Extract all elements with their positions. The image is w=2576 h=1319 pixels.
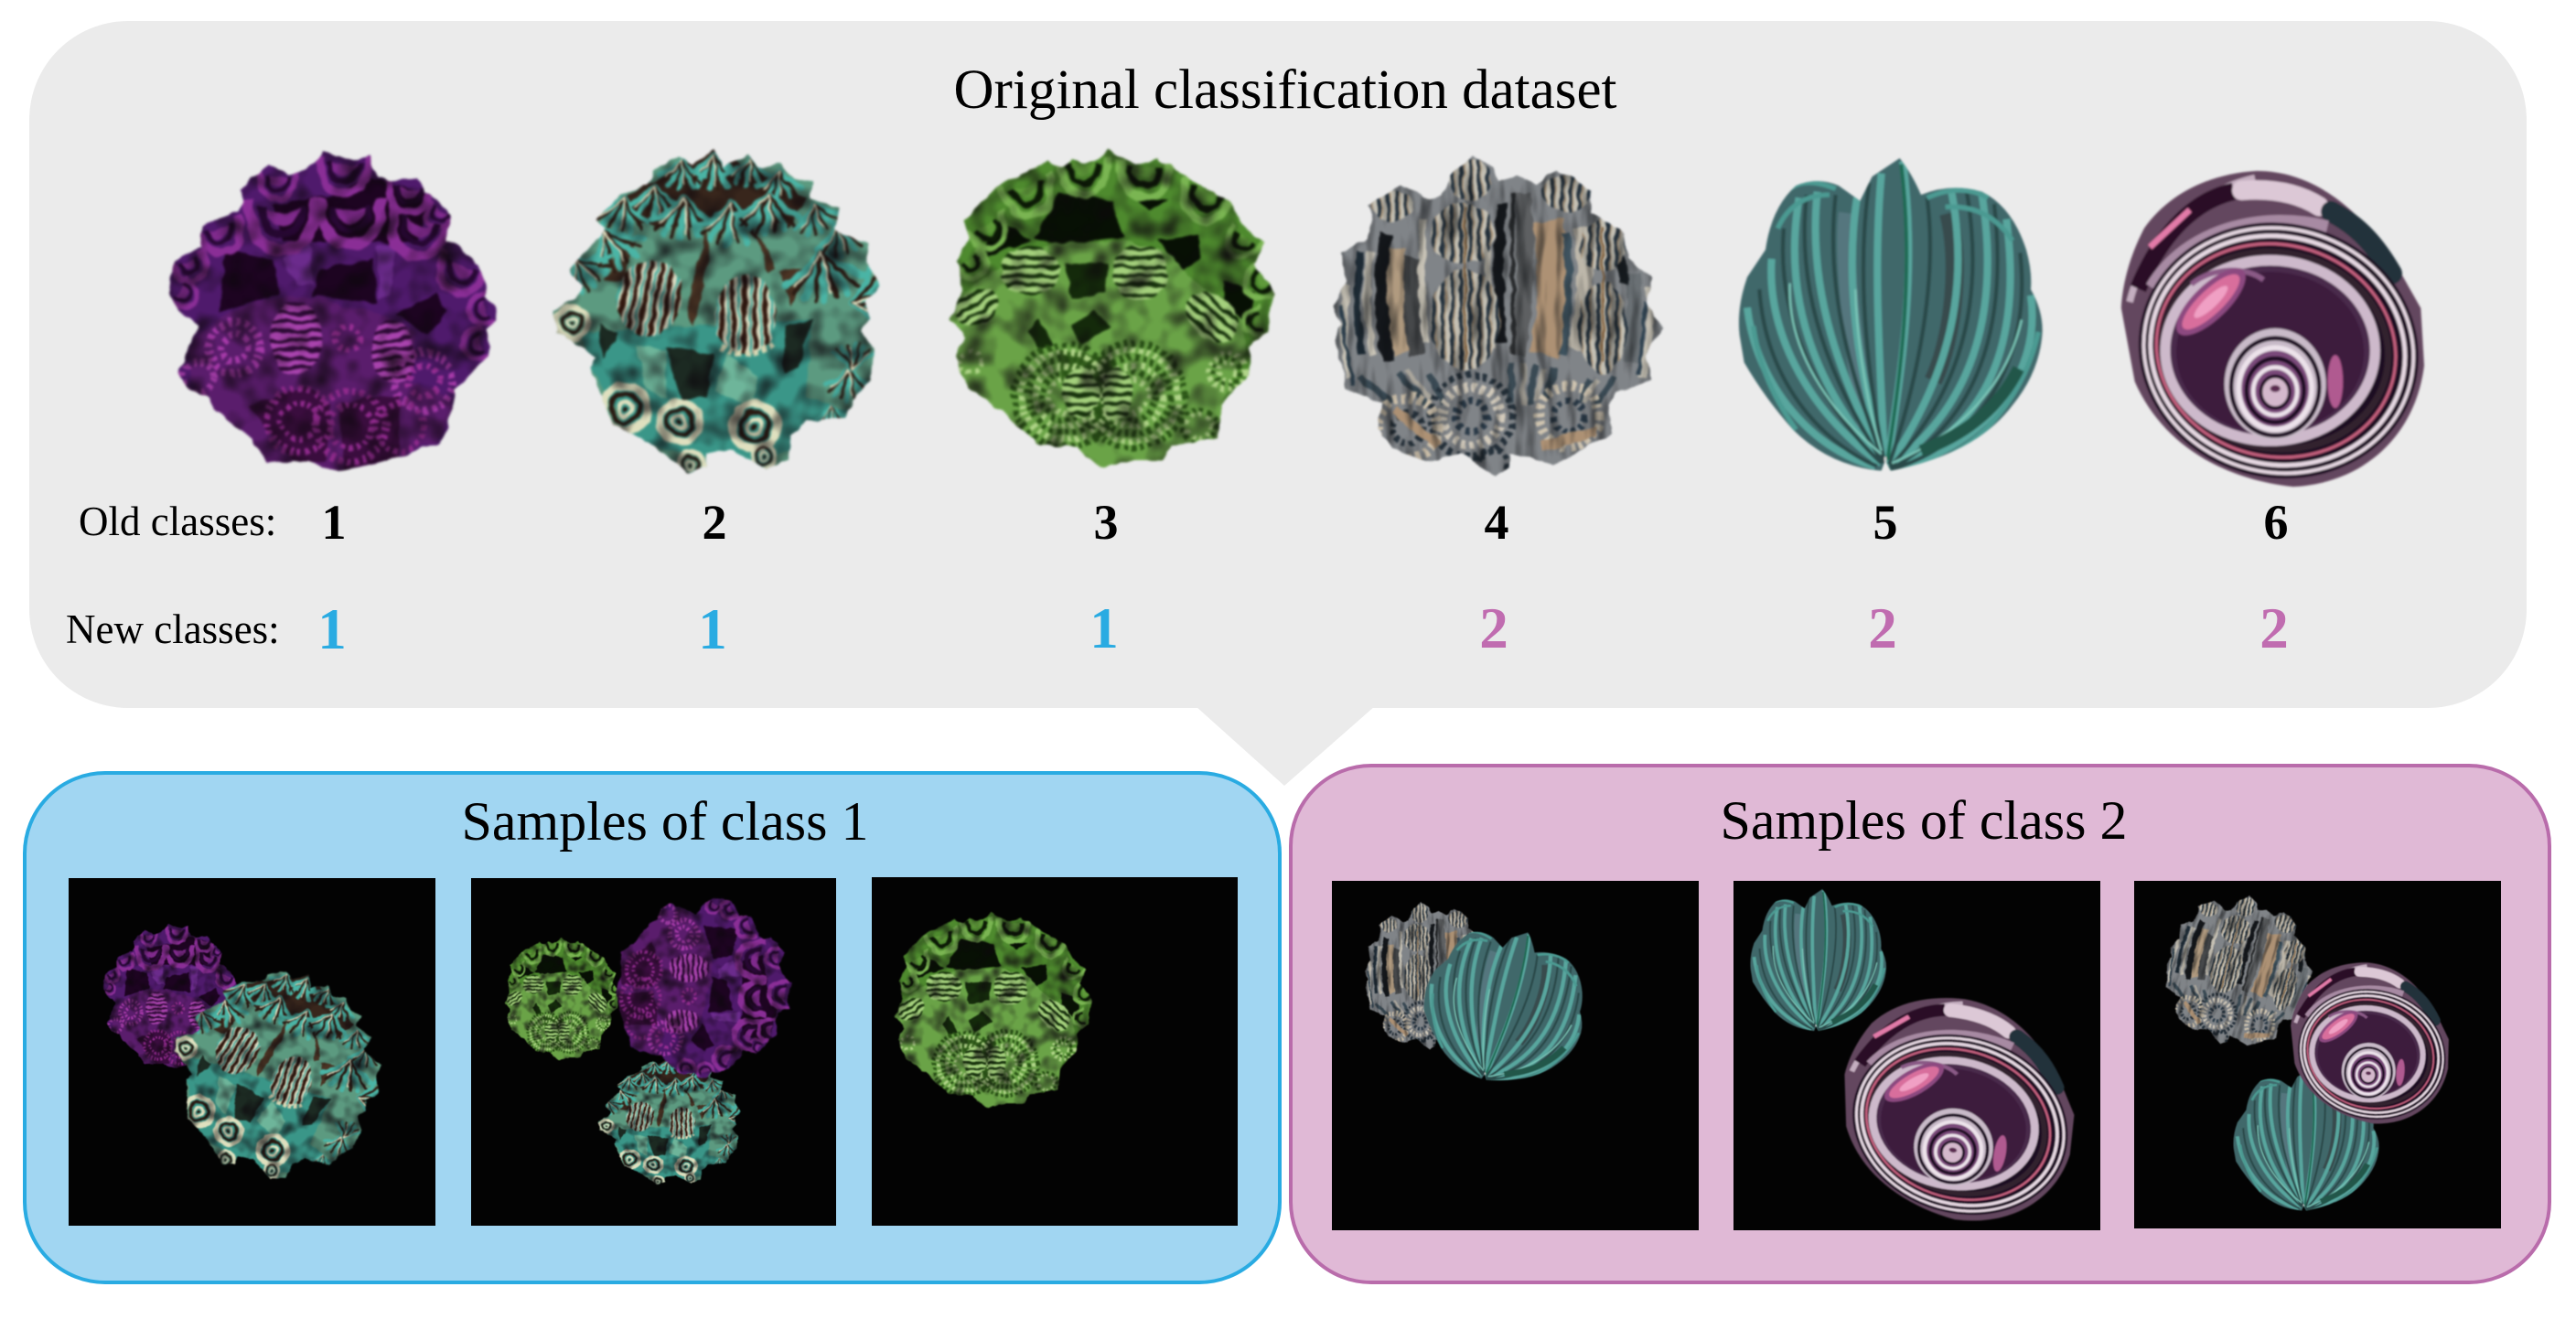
sample image 2 of class 1 (471, 878, 836, 1226)
sample image 2 of class 2 (1733, 879, 2104, 1249)
heading: samples of class 2: Samples of class 2 (1721, 790, 2127, 851)
heading: original classification dataset: Original classification dataset (954, 59, 1617, 121)
sample image 1 of class 2 (1332, 881, 1699, 1230)
new class numbers row (317, 596, 2289, 661)
fractal image: old class 2 (544, 137, 910, 485)
new class numbers row: 2 (1479, 596, 1508, 660)
old class numbers row (322, 495, 2289, 550)
new class numbers row: 2 (1868, 596, 1897, 660)
fractal image: old class 3 (938, 137, 1304, 485)
new class numbers row: 1 (1089, 596, 1119, 660)
panel: samples of class 1 (25, 773, 1280, 1282)
arrow: callout pointer from dataset panel to sample panels (1196, 706, 1375, 786)
old class numbers row: 3 (1094, 495, 1118, 550)
heading: samples of class 1: Samples of class 1 (462, 791, 868, 852)
fractal image: old class 1 (156, 137, 521, 485)
panel: samples of class 2 (1291, 766, 2549, 1282)
sample image 1 of class 1 (69, 878, 435, 1226)
sample image 3 of class 1 (872, 877, 1238, 1226)
new class numbers row: 1 (317, 597, 347, 661)
label: new classes: New classes: (66, 606, 280, 652)
sample image 3 of class 2 (2134, 872, 2501, 1228)
old class numbers row: 4 (1484, 495, 1509, 550)
label: old classes: Old classes: (79, 499, 276, 544)
new class numbers row: 2 (2259, 596, 2289, 660)
old class numbers row: 1 (322, 495, 346, 550)
new class numbers row: 1 (698, 597, 727, 661)
fractal image: old class 4 (1322, 142, 1688, 489)
fractal image: old class 5 (1735, 137, 2055, 485)
old class numbers row: 2 (703, 495, 726, 550)
old class numbers row: 6 (2263, 495, 2289, 550)
old class numbers row: 5 (1873, 495, 1897, 550)
fractal image: old class 6 (2120, 171, 2438, 501)
